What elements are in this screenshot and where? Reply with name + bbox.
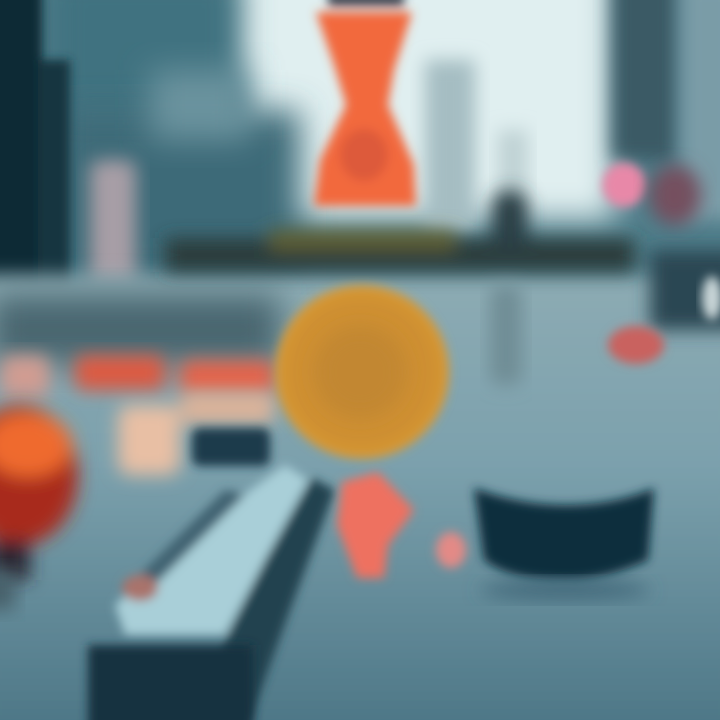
right edge bright spot [702,276,720,320]
pink street marker [608,326,664,364]
left dark building [0,0,70,330]
pink round sign [602,163,646,207]
pink figure [337,472,466,578]
gold coin [275,285,449,459]
dark bench base [88,645,253,720]
dark basket [474,488,654,580]
white bench strip [115,465,335,720]
building sign [90,160,136,295]
orange hourglass billboard [314,0,416,206]
left lower dark edge [0,570,15,610]
pedestrian reflection [490,285,522,385]
red lights row [0,355,275,397]
dark bridge band [165,190,720,330]
background: sky and buildings [0,0,720,300]
ground: wet street [0,275,720,720]
basket shadow [480,580,650,600]
cream light blob [118,392,275,475]
left street background [0,295,280,365]
dark red sign [649,165,701,225]
red car [0,405,78,580]
dark vehicle [192,428,270,466]
